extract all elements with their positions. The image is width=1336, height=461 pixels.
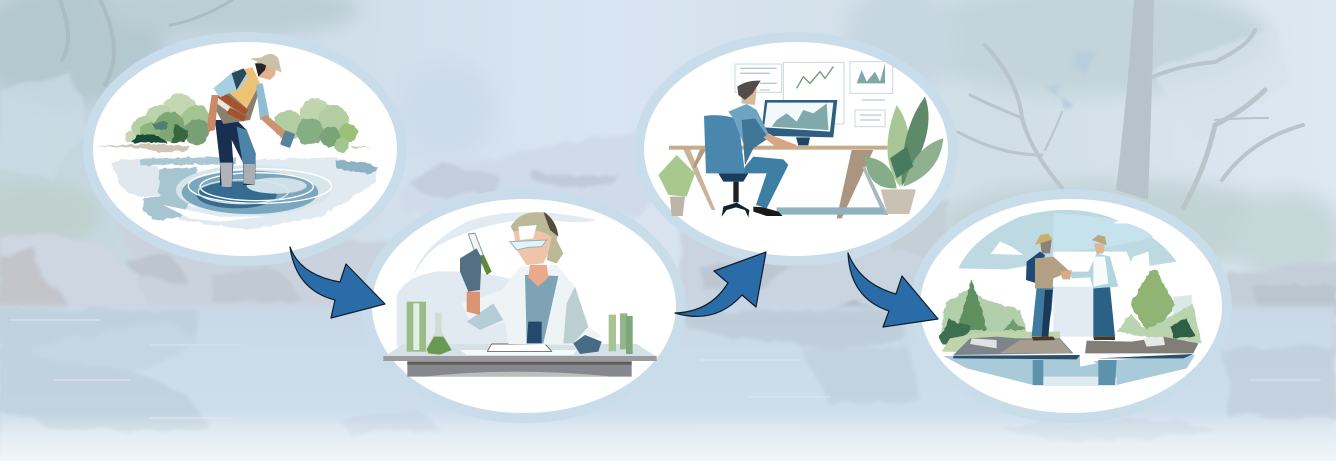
chair [704, 115, 745, 173]
person [728, 104, 770, 165]
figure [215, 120, 256, 188]
panel 2: laboratory oval [362, 189, 686, 423]
arrow: sampling to lab [290, 247, 385, 318]
panel 1: field sampling oval [83, 32, 407, 266]
rocks [942, 332, 1060, 353]
trees left and right [938, 270, 1202, 345]
man left [1026, 252, 1045, 283]
background: painted foliage and trees [0, 30, 1290, 180]
glove and tube [468, 233, 483, 257]
arrow: lab to analysis [675, 252, 766, 316]
illustration: two people shaking hands on river rocks [938, 210, 1202, 386]
water reflection [943, 355, 1195, 385]
monitor [762, 100, 837, 137]
illustration: lab scientist with test tube [383, 212, 657, 377]
background: river water [0, 306, 1336, 461]
background: foliage haze [0, 0, 1336, 290]
head [513, 227, 553, 265]
illustration: analyst at desk with charts [658, 62, 943, 218]
plants [658, 155, 695, 197]
lab coat [462, 265, 602, 345]
man right [1093, 287, 1115, 337]
panel 3: data analysis oval [634, 32, 958, 266]
desk [669, 146, 887, 150]
background: rocks [0, 130, 1336, 350]
panel 4: collaboration oval [910, 189, 1232, 423]
arrow: analysis to stakeholders [848, 253, 938, 327]
illustration: scientist wading in river [95, 54, 378, 230]
glassware left [407, 302, 426, 352]
river [112, 159, 159, 197]
